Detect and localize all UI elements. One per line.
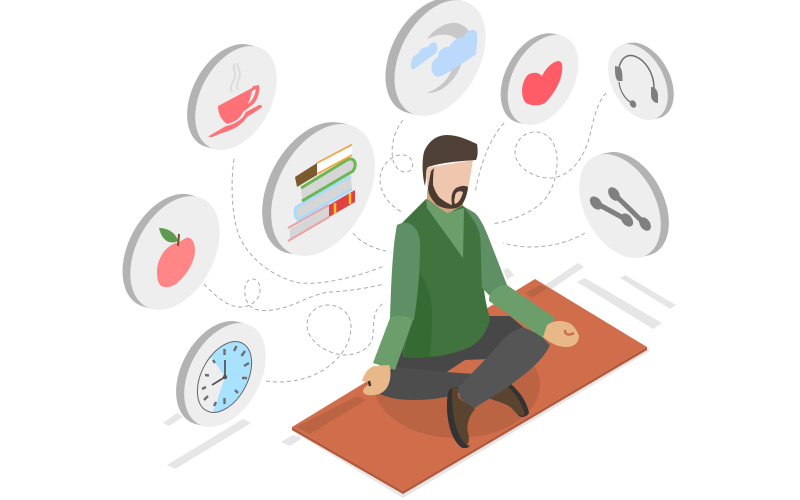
- forearm left: [373, 316, 413, 370]
- head and face: [425, 160, 473, 207]
- disc: coffee: [170, 30, 293, 164]
- collar: [426, 199, 464, 258]
- icon: book stack: [288, 144, 355, 241]
- lower left leg: [380, 367, 487, 400]
- disc: clock: [176, 321, 266, 427]
- front leg: [458, 327, 550, 409]
- vest: [400, 199, 490, 358]
- disc: headset: [596, 32, 686, 130]
- gap: mat between legs: [445, 359, 490, 374]
- disc: books: [241, 104, 396, 274]
- back leg: [380, 316, 523, 400]
- icon: connected nodes: [587, 185, 653, 233]
- meditation illustration: [122, 0, 676, 498]
- person meditating: [362, 135, 579, 448]
- icon: cup: [209, 63, 262, 137]
- upper arm right: [463, 206, 507, 296]
- icon: clouds: [411, 30, 477, 77]
- vest shadow: [403, 273, 432, 358]
- icon: crescent: [427, 23, 470, 93]
- disc: nodes: [563, 138, 686, 272]
- icon: heart: [522, 61, 562, 105]
- upper arm left: [390, 223, 420, 320]
- icon: apple: [157, 228, 195, 287]
- icon: headset: [615, 56, 658, 109]
- mat shadow: [374, 332, 540, 438]
- dashed connector lines: [204, 93, 606, 382]
- hand right: [543, 321, 579, 347]
- disc: heart: [486, 21, 593, 137]
- beard: [428, 168, 468, 209]
- forearm right: [489, 285, 555, 338]
- hair: [423, 135, 478, 186]
- neck: [427, 185, 466, 214]
- boot: front: [447, 387, 475, 448]
- yoga mat: [292, 279, 650, 498]
- mat bands: [296, 396, 366, 434]
- disc: cloud: [367, 0, 504, 131]
- icon: clock face: [196, 341, 252, 413]
- floor strips: [163, 263, 676, 469]
- disc: apple: [104, 179, 238, 325]
- hand left: [362, 365, 390, 395]
- boot: back: [488, 384, 529, 417]
